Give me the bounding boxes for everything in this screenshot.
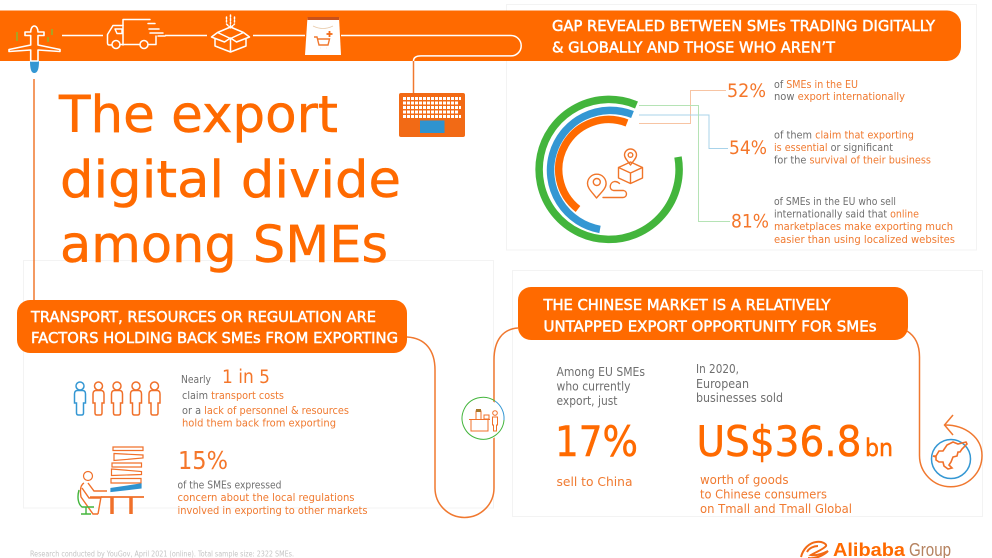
- heading: chinese market: UNTAPPED EXPORT OPPORTUNITY FOR SMEs: [544, 318, 877, 336]
- stat: 36.8 billion dollars: In 2020,: [696, 361, 739, 376]
- icon: plane: [9, 26, 60, 73]
- stat: 17 percent sell to china: who currently: [556, 378, 631, 394]
- stat: 81 percent: [731, 195, 955, 246]
- heading: transport, resources or regulation: [17, 300, 407, 353]
- heading: chinese market: THE CHINESE MARKET IS A RELATIVELY: [543, 296, 831, 314]
- title: among SMEs: [60, 216, 388, 275]
- heading: transport, resources or regulation: FACTORS HOLDING BACK SMEs FROM EXPORTING: [31, 329, 398, 347]
- top orange banner: [0, 10, 961, 61]
- stat: 36.8 billion dollars: US$36.8: [696, 417, 862, 466]
- stat: 36.8 billion dollars: worth of goods: [700, 472, 788, 487]
- text: one in five: claim transport costs: [182, 389, 284, 402]
- text: one in five: Nearly: [181, 373, 211, 386]
- stat: 54 percent: [729, 128, 931, 166]
- stat: 36.8 billion dollars: businesses sold: [696, 390, 783, 405]
- icon: open box: [212, 15, 250, 52]
- stat: 81 percent: internationally said that online: [774, 208, 919, 220]
- stat: 81 percent: 81%: [731, 212, 769, 232]
- stat: 54 percent: of them claim that exporting: [774, 128, 914, 142]
- icon: map of china in circle: [932, 440, 970, 478]
- stat: 81 percent: marketplaces make exporting much: [774, 220, 953, 233]
- stat: 17 percent sell to china: [555, 364, 645, 489]
- icon: laptop keyboard: [399, 93, 465, 137]
- text: fifteen percent: 15%: [178, 446, 228, 475]
- title: [58, 86, 401, 275]
- icon: shopping bag: [305, 17, 341, 55]
- stat: 81 percent: of SMEs in the EU who sell: [774, 195, 896, 208]
- stat: 36.8 billion dollars: to Chinese consumers: [700, 486, 827, 502]
- stat: 52 percent: 52%: [727, 81, 766, 102]
- text: fifteen percent: concern about the local regulations: [178, 491, 355, 504]
- text: fifteen percent: [178, 446, 368, 517]
- ring chart: [539, 99, 679, 239]
- banner connector line: [62, 36, 521, 93]
- connector curve with arrow to map icon: [907, 331, 982, 487]
- icon: five people, one highlighted: [74, 382, 160, 415]
- stat: 36.8 billion dollars: bn: [865, 434, 893, 462]
- stat: 54 percent: is essential or significant: [774, 141, 894, 154]
- text: one in five: hold them back from exporting: [182, 416, 336, 430]
- stat: 52 percent: now export internationally: [774, 90, 905, 103]
- stat: 81 percent: easier than using localized websites: [774, 233, 955, 246]
- stat: 54 percent: 54%: [729, 138, 767, 159]
- heading: gap revealed: [552, 17, 936, 56]
- connector curve between lower panels: [407, 328, 518, 517]
- icon: person at desk with paper stack: [78, 447, 144, 514]
- text: one in five: [181, 367, 349, 430]
- title: The export: [58, 86, 338, 145]
- stat: 17 percent sell to china: 17%: [555, 417, 638, 466]
- logo: Alibaba Group: [801, 540, 951, 558]
- text: fifteen percent: of the SMEs expressed: [178, 478, 282, 492]
- vertical orange line from plane to first heading: [33, 79, 35, 300]
- heading: gap revealed: & GLOBALLY AND THOSE WHO AREN’T: [552, 38, 836, 56]
- stat: 52 percent: [727, 78, 905, 103]
- stat: 52 percent: of SMEs in the EU: [774, 78, 858, 91]
- stat: 54 percent: for the survival of their business: [774, 154, 931, 166]
- ring chart connector lines: [639, 90, 730, 222]
- stat: 36.8 billion dollars: [696, 361, 893, 516]
- heading: transport, resources or regulation: TRANSPORT, RESOURCES OR REGULATION ARE: [30, 308, 376, 326]
- text: one in five: or a lack of personnel & resources: [182, 404, 349, 417]
- text: one in five: 1 in 5: [222, 367, 270, 388]
- icon: delivery truck: [108, 20, 165, 48]
- text: fifteen percent: involved in exporting to other markets: [178, 504, 368, 517]
- icon: shop counter in circle: [462, 397, 504, 441]
- icon: location pin, route and parcel: [588, 149, 642, 198]
- heading: chinese market: [518, 287, 908, 340]
- stat: 17 percent sell to china: sell to China: [556, 474, 632, 489]
- stat: 36.8 billion dollars: on Tmall and Tmall Global: [700, 501, 852, 516]
- heading: gap revealed: GAP REVEALED BETWEEN SMEs TRADING DIGITALLY: [552, 17, 936, 35]
- stat: 17 percent sell to china: Among EU SMEs: [556, 364, 645, 379]
- stat: 17 percent sell to china: export, just: [556, 393, 618, 408]
- title: digital divide: [60, 151, 401, 210]
- stat: 36.8 billion dollars: European: [696, 376, 749, 391]
